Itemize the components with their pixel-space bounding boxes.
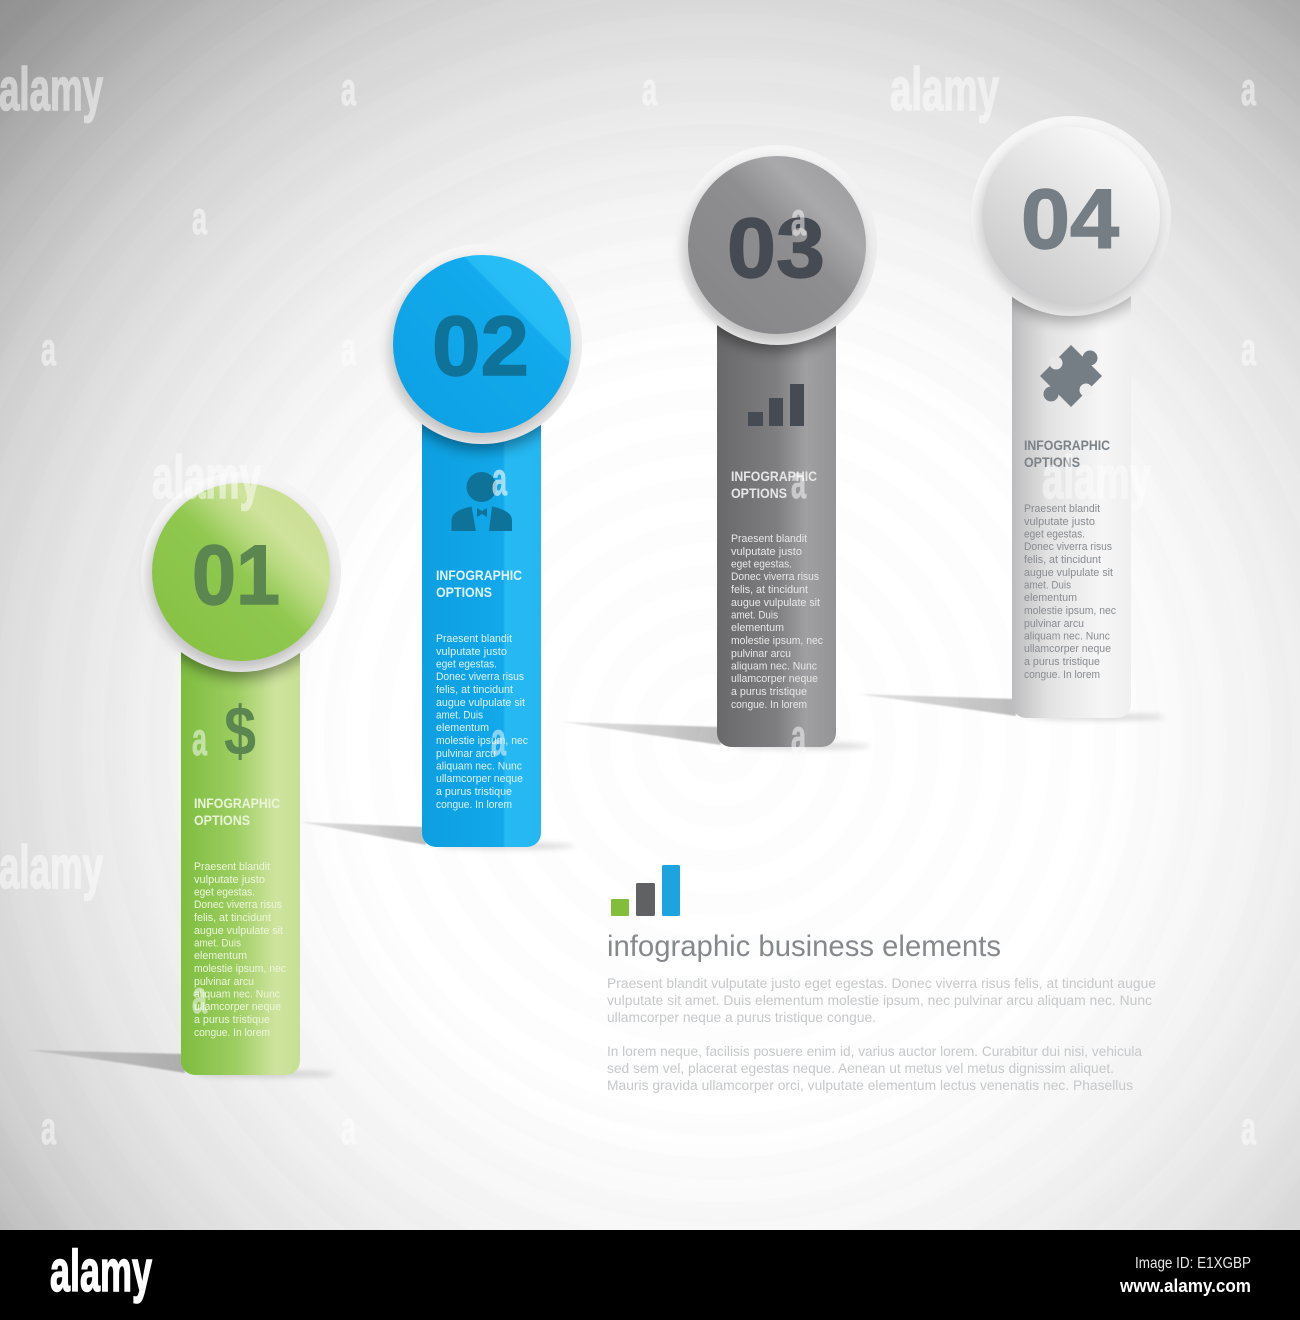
watermarks over cards (152, 444, 506, 1023)
watermark logos and marks: alamy (0, 56, 103, 123)
icon: coloured bar chart (611, 865, 680, 916)
footer bar (0, 1230, 1300, 1320)
option text: congue. In lorem (731, 699, 807, 711)
option text: eget egestas. (194, 886, 255, 898)
option text: Donec viverra risus (194, 899, 282, 911)
light stem (1012, 284, 1131, 718)
disc ring (382, 244, 582, 444)
watermark logos and marks: a (642, 63, 657, 115)
watermark logos and marks: a (1241, 323, 1256, 375)
option text: felis, at tincidunt (731, 584, 808, 596)
icon: dollar: $ (224, 692, 256, 770)
option text: a purus tristique (1024, 656, 1100, 668)
option text: Donec viverra risus (731, 571, 819, 583)
watermark logos and marks: a (341, 1102, 356, 1154)
long cast shadow (563, 722, 721, 745)
number 03: 03 (727, 201, 825, 295)
watermark logos and marks: a (41, 323, 56, 375)
disc face (148, 483, 330, 668)
disc ring (677, 145, 877, 345)
watermark marks: a (791, 456, 806, 508)
icon: bar chart (748, 384, 804, 426)
disc ring (141, 472, 341, 672)
shadow under disc (181, 652, 300, 686)
number 01: 01 (192, 528, 280, 622)
option text (436, 633, 529, 811)
card 04: light grey (857, 116, 1173, 720)
option text: pulvinar arcu (731, 648, 791, 660)
option text: amet. Duis (436, 710, 483, 722)
first paragraph (607, 975, 1156, 1025)
option text: elementum (1024, 592, 1077, 604)
heading: infographic business elements (607, 930, 1001, 963)
option text (731, 533, 824, 711)
option text: augue vulpulate sit (194, 925, 283, 937)
option text: molestie ipsum, nec (1024, 605, 1117, 617)
option heading: INFOGRAPHIC (731, 468, 817, 484)
option heading: OPTIONS (731, 485, 787, 501)
card 02: blue (300, 244, 584, 850)
option text: ullamcorper neque (194, 1001, 281, 1013)
shadow under disc (422, 424, 541, 459)
icon: puzzle piece (1040, 345, 1102, 407)
option text: ullamcorper neque (1024, 643, 1111, 655)
option text: pulvinar arcu (1024, 618, 1084, 630)
disc face (684, 156, 866, 341)
watermark marks (791, 193, 806, 762)
option text: Praesent blandit (1024, 503, 1100, 515)
ground shadow (436, 842, 576, 850)
card 03: dark grey (563, 145, 879, 762)
option text (194, 861, 287, 1039)
first paragraph: ullamcorper neque a purus tristique congue. (607, 1009, 876, 1025)
watermark logos and marks: a (341, 323, 356, 375)
first paragraph: Praesent blandit vulputate justo eget egestas. Donec viverra risus felis, at tincidunt augue (607, 975, 1156, 991)
second paragraph (607, 1043, 1142, 1093)
option heading (1024, 437, 1110, 470)
option text: Donec viverra risus (436, 671, 524, 683)
option text: Praesent blandit (194, 861, 270, 873)
option text: pulvinar arcu (436, 748, 496, 760)
watermark logos and marks: alamy (0, 834, 103, 901)
ground shadow (195, 1070, 335, 1078)
option text: eget egestas. (1024, 528, 1085, 540)
option text: felis, at tincidunt (1024, 554, 1101, 566)
option text: augue vulpulate sit (436, 697, 525, 709)
option heading: INFOGRAPHIC (194, 795, 280, 811)
long cast shadow (857, 694, 1016, 716)
option heading (436, 567, 522, 600)
option text: elementum (194, 950, 247, 962)
option text: congue. In lorem (194, 1027, 270, 1039)
watermark logos and marks: a (1241, 1102, 1256, 1154)
option text: augue vulpulate sit (1024, 567, 1113, 579)
option text: vulputate justo (436, 646, 507, 658)
long cast shadow (300, 822, 426, 845)
option text (1024, 503, 1117, 681)
watermark mark: a (492, 453, 507, 505)
number 02: 02 (432, 299, 529, 393)
watermarks over cards: a (491, 713, 506, 765)
option text: congue. In lorem (436, 799, 512, 811)
ground shadow (731, 742, 871, 750)
green stem (181, 640, 300, 1075)
option text: ullamcorper neque (731, 673, 818, 685)
watermarks over cards: a (192, 713, 207, 765)
option text: vulputate justo (731, 546, 802, 558)
option text: molestie ipsum, nec (731, 635, 824, 647)
summary block (607, 865, 1156, 1093)
option text: amet. Duis (194, 938, 241, 950)
option text: amet. Duis (731, 610, 778, 622)
option text: Praesent blandit (436, 633, 512, 645)
watermark marks: a (791, 193, 806, 245)
shadow under disc (717, 325, 836, 358)
option text: a purus tristique (194, 1014, 270, 1026)
disc ring (971, 116, 1171, 316)
option text: amet. Duis (1024, 580, 1071, 592)
option text: aliquam nec. Nunc (1024, 630, 1111, 642)
watermark logo: alamy (1042, 444, 1151, 511)
option text: aliquam nec. Nunc (731, 660, 818, 672)
blue stem (422, 412, 541, 847)
footer logo: alamy (50, 1239, 152, 1304)
second paragraph: Mauris gravida ullamcorper orci, vulputate elementum lectus venenatis nec. Phasellus (607, 1077, 1133, 1093)
option heading: INFOGRAPHIC (1024, 437, 1110, 453)
watermark marks: a (791, 710, 806, 762)
watermark logos and marks: a (192, 192, 207, 244)
option text: ullamcorper neque (436, 773, 523, 785)
option heading: OPTIONS (1024, 454, 1080, 470)
option text: congue. In lorem (1024, 669, 1100, 681)
disc face (978, 127, 1160, 312)
option text: molestie ipsum, nec (436, 735, 529, 747)
option heading: OPTIONS (436, 584, 492, 600)
option text: molestie ipsum, nec (194, 963, 287, 975)
watermarks over cards: a (192, 971, 207, 1023)
option heading (731, 468, 817, 501)
option text: vulputate justo (1024, 516, 1095, 528)
option text: a purus tristique (731, 686, 807, 698)
watermark logos and marks: a (341, 63, 356, 115)
ground shadow (1026, 714, 1166, 720)
option text: aliquam nec. Nunc (436, 760, 523, 772)
number 04: 04 (1021, 172, 1119, 266)
second paragraph: In lorem neque, facilisis posuere enim id, varius auctor lorem. Curabitur dui nisi, vehicula (607, 1043, 1142, 1059)
option text: felis, at tincidunt (436, 684, 513, 696)
grey stem (717, 313, 836, 747)
option heading: OPTIONS (194, 812, 250, 828)
option heading (194, 795, 280, 828)
option text: elementum (436, 722, 489, 734)
option text: Praesent blandit (731, 533, 807, 545)
option text: a purus tristique (436, 786, 512, 798)
option text: vulputate justo (194, 874, 265, 886)
option text: felis, at tincidunt (194, 912, 271, 924)
long cast shadow (27, 1050, 185, 1073)
card 01: green (27, 472, 343, 1078)
option text: augue vulpulate sit (731, 597, 820, 609)
watermarks over cards: alamy (152, 444, 261, 511)
second paragraph: sed sem vel, placerat egestas neque. Aenean ut metus vel metus dignissim aliquet. (607, 1060, 1114, 1076)
option text: pulvinar arcu (194, 976, 254, 988)
option text: Donec viverra risus (1024, 541, 1112, 553)
watermark logos and marks: a (1241, 63, 1256, 115)
shadow under disc (1012, 296, 1131, 330)
option text: aliquam nec. Nunc (194, 988, 281, 1000)
option text: elementum (731, 622, 784, 634)
icon: businessman (452, 472, 512, 531)
disc face (389, 255, 571, 440)
website: www.alamy.com (1119, 1276, 1251, 1296)
image id: Image ID: E1XGBP (1135, 1255, 1251, 1272)
watermark logos and marks: alamy (890, 56, 999, 123)
watermark logos and marks: a (41, 1102, 56, 1154)
option text: eget egestas. (731, 558, 792, 570)
option heading: INFOGRAPHIC (436, 567, 522, 583)
first paragraph: vulputate sit amet. Duis elementum molestie ipsum, nec pulvinar arcu aliquam nec. Nunc (607, 992, 1152, 1008)
option text: eget egestas. (436, 658, 497, 670)
